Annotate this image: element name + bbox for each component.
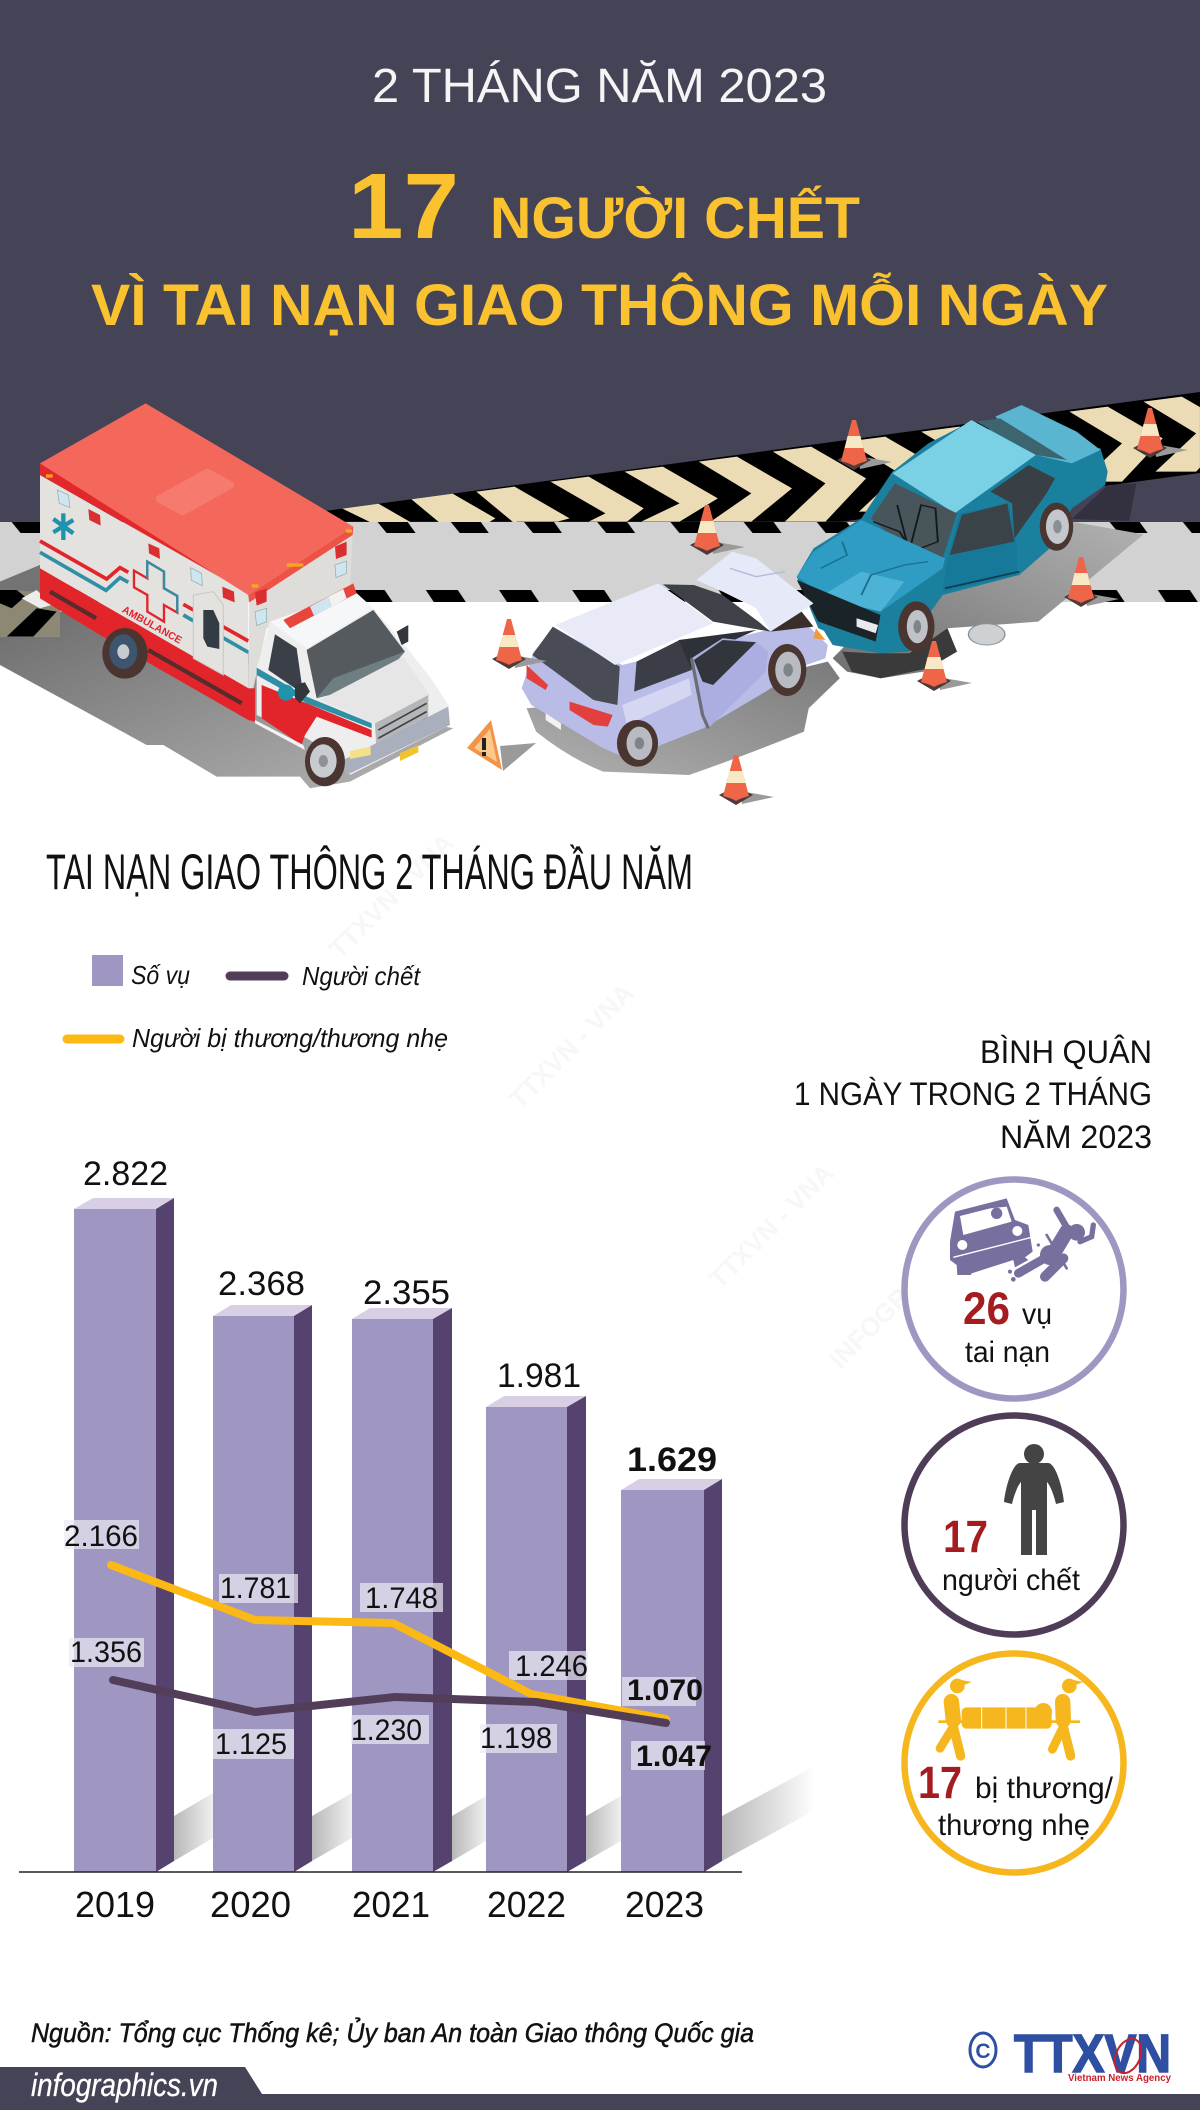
- shadow: [0, 565, 60, 637]
- puddle: [842, 628, 957, 678]
- cone: [1064, 557, 1119, 607]
- bar value labels: 2.368: [218, 1265, 305, 1303]
- stat: 17 bị thương: 17: [918, 1757, 962, 1808]
- grille: [797, 580, 880, 642]
- stat: 17 bị thương: thương nhẹ: [938, 1809, 1090, 1842]
- body: [522, 622, 828, 758]
- stat: 17 bị thương: [918, 1757, 1114, 1842]
- side heading: [794, 1034, 1152, 1155]
- chart title: TAI NẠN GIAO THÔNG 2 THÁNG ĐẦU NĂM: [46, 844, 693, 900]
- road scene: blue car shadow: [833, 483, 1144, 678]
- red lower body: [40, 568, 255, 722]
- rear wheel: [102, 628, 148, 679]
- front wheel: [305, 737, 345, 786]
- illustration: ambulance: [0, 403, 453, 788]
- roof: [40, 403, 353, 595]
- bar value labels: [83, 1155, 717, 1479]
- tail lights: [527, 665, 548, 690]
- line value labels: 1.198: [480, 1722, 552, 1755]
- cab: [257, 592, 450, 775]
- car body: [797, 425, 1108, 652]
- heading: người chết: NGƯỜI CHẾT: [490, 186, 860, 251]
- cone: [1133, 408, 1188, 458]
- teal cab stripe: [257, 668, 372, 728]
- side heading: 1 NGÀY TRONG 2 THÁNG: [794, 1076, 1152, 1112]
- bar value labels: 1.981: [497, 1357, 581, 1395]
- mirrors: [397, 625, 408, 645]
- bar 2021: [352, 1308, 452, 1872]
- cross: [134, 562, 177, 622]
- hubcap: [968, 624, 1005, 645]
- year labels: [75, 1884, 704, 1925]
- hood: [320, 657, 430, 723]
- bar shadows: [174, 1793, 621, 1861]
- headlight: [350, 747, 371, 759]
- cone: [719, 755, 774, 805]
- trunk: [995, 405, 1100, 463]
- bar 2019: [74, 1198, 174, 1872]
- stat: 26 vụ tai nạn: vụ: [1022, 1298, 1052, 1331]
- panel: deaths per day: [904, 1416, 1124, 1634]
- legend: người chết: Người chết: [302, 961, 422, 991]
- bar 2023: [621, 1479, 722, 1872]
- label boxes: [64, 1520, 705, 1770]
- line value labels: 2.166: [64, 1520, 138, 1553]
- roof hatch: [159, 472, 231, 512]
- bar value labels: 2.355: [363, 1274, 450, 1312]
- year labels: 2022: [487, 1884, 566, 1925]
- windshield: [871, 483, 957, 558]
- roof marker lights: [46, 474, 352, 588]
- text: TTXVN - VNA: [503, 977, 640, 1114]
- line value labels: 1.070: [627, 1674, 703, 1707]
- road scene: grey road with dashes: [0, 522, 1200, 602]
- panel: accidents per day: [904, 1180, 1124, 1398]
- text: TTXVN - VNA: [703, 1157, 840, 1294]
- stat: 17 người chết: [942, 1511, 1081, 1597]
- line value labels: 1.246: [515, 1650, 588, 1683]
- front of box: [248, 532, 353, 688]
- cone: [837, 420, 892, 470]
- road scene: chevron band: [326, 392, 1200, 522]
- side panel: [40, 475, 248, 688]
- icon: stretcher carriers: [938, 1679, 1083, 1756]
- wheels: [617, 720, 658, 767]
- windshield: [307, 610, 405, 698]
- stat: 17 người chết: người chết: [942, 1564, 1081, 1597]
- line value labels: 1.047: [636, 1740, 712, 1773]
- background: dark header: [0, 0, 1200, 522]
- heading: second line: VÌ TAI NẠN GIAO THÔNG MỖI NGÀY: [91, 273, 1108, 338]
- icon: warning triangle: [467, 720, 536, 771]
- red cab fender: [262, 685, 372, 745]
- line value labels: [64, 1520, 712, 1773]
- hood raised: [696, 552, 814, 632]
- line: người bị thương: [111, 1565, 666, 1719]
- bar 2022: [486, 1396, 586, 1872]
- license plate: [400, 745, 418, 761]
- stat: 17 người chết: 17: [943, 1511, 988, 1562]
- year labels: 2023: [625, 1884, 704, 1925]
- line value labels: 1.781: [220, 1572, 291, 1605]
- illustration: blue crashed car: [797, 405, 1108, 678]
- bar value labels: 2.822: [83, 1155, 168, 1193]
- year labels: 2019: [75, 1884, 155, 1925]
- line: người chết: [113, 1680, 666, 1723]
- legend: [67, 955, 448, 1053]
- label AMBULANCE: AMBULANCE: [120, 605, 184, 647]
- logo: TTXVN: Vietnam News Agency: [1068, 2073, 1171, 2084]
- legend: người bị thương: Người bị thương/thương nhẹ: [132, 1023, 448, 1053]
- text: TTXVN - VNA: [323, 827, 460, 964]
- bar 2020: [213, 1305, 312, 1872]
- line value labels: 1.356: [70, 1636, 142, 1669]
- legend: số vụ: Số vụ: [131, 960, 190, 990]
- roof: [555, 583, 713, 665]
- year labels: 2020: [210, 1884, 291, 1925]
- rear window: [532, 627, 620, 705]
- side red and teal stripes: [40, 541, 128, 579]
- cone: [917, 641, 972, 691]
- line value labels: 1.230: [351, 1714, 422, 1747]
- bumper: [343, 707, 450, 775]
- wheels: [1040, 503, 1073, 551]
- legend: số vụ: [92, 955, 190, 990]
- illustration: lavender crashed car: [522, 552, 828, 767]
- stat: 26 vụ tai nạn: [963, 1283, 1052, 1369]
- line value labels: 1.125: [215, 1728, 287, 1761]
- road scene: white car shadow: [527, 662, 840, 775]
- hood: [797, 520, 945, 612]
- side lights and windows: [57, 490, 70, 508]
- stat: 26 vụ tai nạn: tai nạn: [965, 1336, 1050, 1369]
- stat: 26 vụ tai nạn: 26: [963, 1283, 1010, 1334]
- side window: [634, 640, 692, 692]
- cone: [690, 505, 745, 555]
- roof edge: [40, 463, 250, 594]
- footer bar: [0, 2067, 1200, 2110]
- heading: period: 2 THÁNG NĂM 2023: [372, 60, 827, 113]
- bar chart: [19, 1155, 815, 1925]
- windshield: [663, 584, 770, 632]
- side heading: BÌNH QUÂN: [980, 1034, 1152, 1070]
- line value labels: 1.748: [365, 1582, 438, 1615]
- panel: injured per day: [904, 1654, 1124, 1872]
- cone: [492, 619, 547, 669]
- door: [193, 592, 223, 675]
- cab roof: [270, 592, 373, 648]
- star of life: [53, 513, 73, 540]
- cab side window: [268, 634, 302, 688]
- side heading: NĂM 2023: [1000, 1119, 1152, 1155]
- icon: car hitting motorbike: [950, 1198, 1093, 1282]
- text: INFOGRAPHICS: [823, 1212, 985, 1374]
- website: infographics.vn: [31, 2067, 218, 2103]
- source note: Nguồn: Tổng cục Thống kê; Ủy ban An toàn Giao thông Quốc gia: [31, 2015, 754, 2048]
- icon: person: [1004, 1444, 1064, 1555]
- year labels: 2021: [352, 1884, 430, 1925]
- door and windows: [943, 503, 1017, 592]
- light bar: [283, 583, 357, 628]
- stat: 17 bị thương: bị thương/: [975, 1772, 1114, 1805]
- roof: [892, 420, 1036, 513]
- grille: [375, 695, 428, 753]
- logo: TTXVN: C: [975, 2040, 991, 2063]
- bar value labels: 1.629: [627, 1441, 717, 1479]
- logo: TTXVN: TTXVN: [1014, 2024, 1171, 2084]
- open door: [692, 638, 768, 728]
- cab star: [278, 685, 294, 701]
- heading: big number 17: 17: [348, 154, 459, 258]
